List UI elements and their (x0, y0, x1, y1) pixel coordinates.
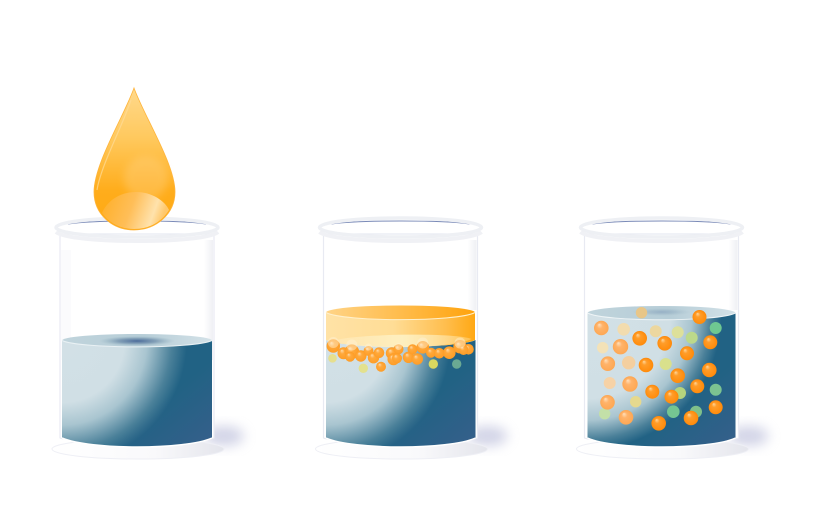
oil layer (326, 306, 475, 347)
base plate (52, 439, 224, 459)
rim (580, 218, 742, 241)
beaker 2: oil layer on water (316, 218, 508, 459)
orange droplets (632, 310, 723, 431)
rim (320, 218, 482, 241)
oil droplets under layer (327, 339, 474, 373)
rim (56, 218, 218, 241)
glass wall (584, 234, 738, 441)
droplets crossing oil boundary (328, 337, 466, 350)
glass wall (60, 234, 214, 441)
base plate (576, 439, 748, 459)
water (62, 334, 212, 447)
light orange droplets (594, 321, 638, 425)
beaker 1: oil drop above water (52, 88, 244, 459)
glass wall (324, 234, 478, 441)
icon: oil drop (94, 88, 175, 230)
base shadow (468, 426, 508, 446)
base shadow (728, 426, 768, 446)
base plate (316, 439, 488, 459)
water (326, 340, 476, 447)
base shadow (204, 426, 244, 446)
water (588, 306, 736, 447)
green and pale droplets (597, 307, 722, 419)
beaker 3: oil droplets dispersed in water (576, 218, 768, 459)
